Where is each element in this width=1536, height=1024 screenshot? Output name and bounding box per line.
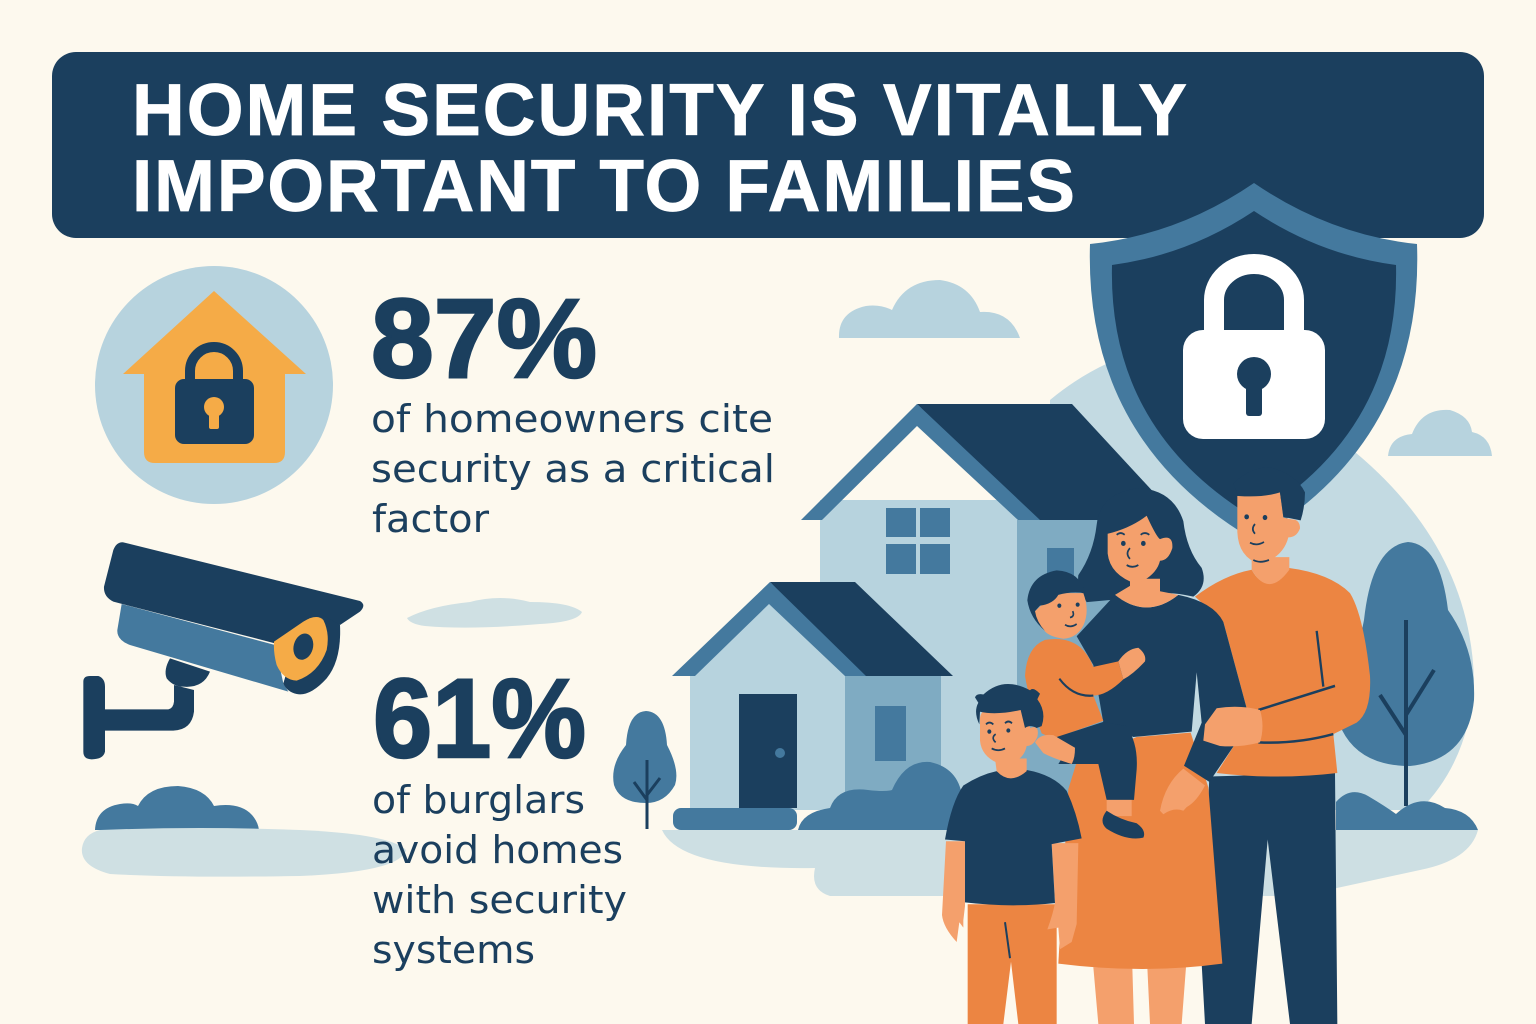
- stat: 87%: [371, 276, 775, 541]
- back house: [801, 404, 1170, 820]
- person: mother: [1058, 488, 1247, 1024]
- stat description: burglars: [372, 778, 627, 972]
- stat description: burglars: avoid homes: [372, 828, 623, 872]
- stat description: homeowners: factor: [372, 497, 489, 541]
- ground shape: [662, 830, 1478, 896]
- bushes: right: [1336, 792, 1478, 830]
- family: [942, 467, 1370, 1024]
- door: [739, 694, 797, 808]
- title text: [132, 70, 1187, 227]
- title text: IMPORTANT TO FAMILIES: [132, 146, 1075, 227]
- stat: 61%: [372, 656, 627, 972]
- stat description: homeowners: [371, 397, 775, 541]
- title text: HOME SECURITY IS VITALLY: [132, 70, 1187, 151]
- decorative cloud: mid left: [407, 598, 582, 628]
- stat description: burglars: of burglars: [372, 778, 585, 822]
- stat: 87%: 87%: [371, 276, 597, 401]
- tree: small left: [613, 711, 676, 829]
- title banner: [52, 52, 1484, 238]
- stat description: homeowners: of homeowners cite: [371, 397, 773, 441]
- background hill circle: [1050, 340, 1474, 810]
- person: father: [1195, 467, 1370, 1024]
- window: [886, 508, 950, 574]
- cloud: right: [1388, 410, 1492, 456]
- front house: [672, 582, 953, 830]
- decorative bush and ground: lower left: [82, 786, 406, 877]
- bushes: center: [798, 762, 990, 830]
- stat description: burglars: with security: [372, 878, 627, 922]
- tree: right: [1342, 542, 1474, 806]
- stat description: burglars: systems: [372, 928, 535, 972]
- person: boy: [942, 684, 1082, 1024]
- person: toddler: [1025, 570, 1145, 838]
- stat: 61%: 61%: [373, 656, 586, 781]
- icon: security camera: [83, 542, 363, 759]
- stat description: homeowners: security as a critical: [371, 447, 775, 491]
- person: father's hand: [1203, 707, 1262, 746]
- icon: shield with padlock: [1090, 183, 1417, 540]
- icon: house with padlock in circle: [95, 266, 333, 504]
- cloud: top: [839, 280, 1020, 338]
